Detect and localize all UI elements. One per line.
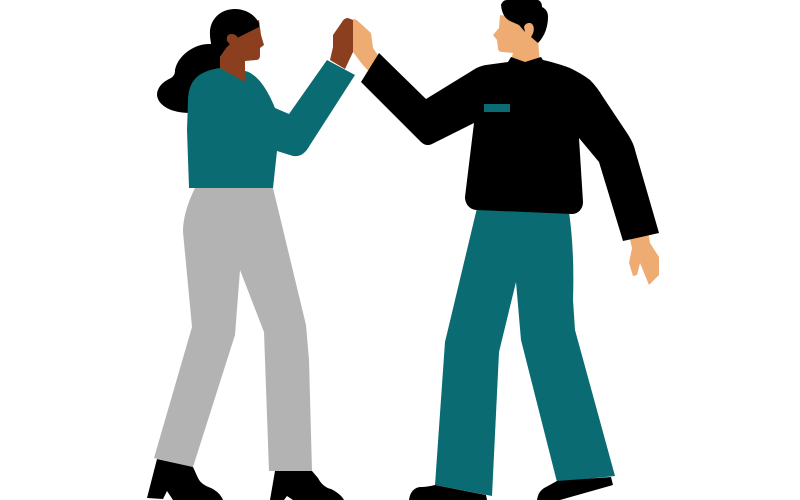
woman right shoe xyxy=(270,471,344,500)
man ear xyxy=(524,23,534,37)
woman left shoe xyxy=(147,459,223,500)
man face and neck xyxy=(493,15,540,64)
woman teal sweater xyxy=(187,60,355,188)
man raised hand xyxy=(353,19,380,75)
man lowered hand xyxy=(629,231,659,285)
man right shoe xyxy=(537,477,613,500)
woman grey trousers xyxy=(154,188,312,471)
woman raised hand xyxy=(330,18,353,69)
man hair xyxy=(501,0,548,43)
man left shoe xyxy=(409,485,487,500)
woman ear xyxy=(227,34,238,47)
man teal chest badge xyxy=(484,104,510,112)
man black sweater xyxy=(361,53,659,241)
man teal trousers xyxy=(435,208,615,496)
figure: woman xyxy=(147,9,355,500)
woman face and neck xyxy=(220,20,264,84)
woman hair xyxy=(157,9,259,113)
figure: man xyxy=(353,0,659,500)
